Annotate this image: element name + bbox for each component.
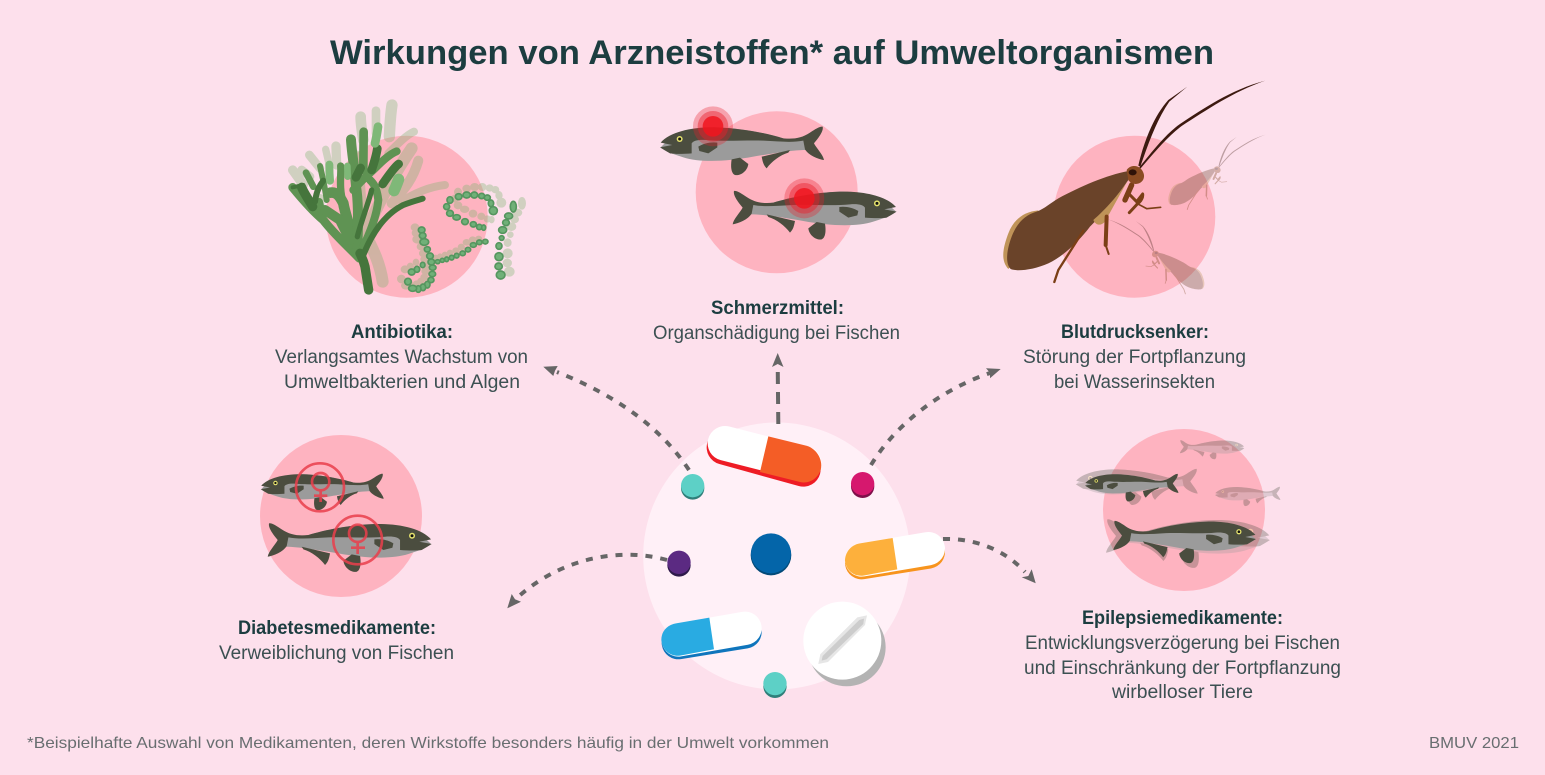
text: Diabetesmedikamente effect: Verweiblichung von Fischen	[219, 643, 454, 664]
icon: fish with organ damage	[660, 106, 897, 273]
heading: Epilepsiemedikamente: Epilepsiemedikamente:	[1082, 608, 1283, 629]
panel: Schmerzmittel	[653, 106, 900, 344]
pill: magenta	[851, 472, 874, 498]
pill: purple	[667, 551, 691, 577]
panel: medication circle	[643, 422, 928, 698]
pill: red and white capsule	[724, 436, 821, 482]
icon: water insects	[1003, 81, 1266, 298]
pill: teal bottom	[763, 672, 787, 698]
text: Blutdrucksenker effect: bei Wasserinsekten	[1054, 372, 1215, 393]
icon: algae and bacteria	[293, 105, 525, 298]
panel: Antibiotika	[275, 105, 528, 393]
text: Epilepsiemedikamente effect: und Einschränkung der Fortpflanzung	[1024, 658, 1341, 679]
pill: orange and white capsule	[845, 538, 928, 576]
heading: Blutdrucksenker: Blutdrucksenker:	[1061, 322, 1209, 343]
heading: Antibiotika: Antibiotika:	[351, 322, 453, 343]
text: Epilepsiemedikamente effect: Entwicklungsverzögerung bei Fischen	[1025, 633, 1340, 654]
text: Blutdrucksenker effect: Störung der Fortpflanzung	[1023, 347, 1246, 368]
arrow: to Diabetesmedikamente	[507, 555, 667, 608]
credit: BMUV 2021	[1429, 735, 1519, 752]
text: Schmerzmittel effect: Organschädigung bei Fischen	[653, 323, 900, 344]
arrow: to Blutdrucksenker	[871, 368, 1001, 465]
text: Antibiotika effect: Verlangsamtes Wachstum von	[275, 347, 528, 368]
pill: white scored tablet	[803, 602, 886, 686]
panel: Epilepsiemedikamente	[1024, 429, 1341, 703]
heading: Schmerzmittel: Schmerzmittel:	[711, 298, 844, 319]
title: Wirkungen von Arzneistoffen* auf Umweltorganismen	[330, 34, 1214, 72]
panel: Blutdrucksenker	[1003, 81, 1266, 393]
footnote: *Beispielhafte Auswahl von Medikamenten, deren Wirkstoffe besonders häufig in der Umwelt vorkommen	[27, 735, 829, 752]
arrow: to Schmerzmittel	[772, 353, 784, 424]
icon: fish with female symbols	[260, 435, 432, 597]
icon: fish of differing size	[1076, 429, 1280, 591]
heading: Diabetesmedikamente: Diabetesmedikamente:	[238, 618, 436, 639]
pill: large blue	[751, 533, 791, 575]
text: Epilepsiemedikamente effect: wirbelloser Tiere	[1111, 682, 1253, 703]
pill: teal top	[681, 474, 704, 500]
arrow: to Epilepsiemedikamente	[943, 539, 1036, 583]
text: Antibiotika effect: Umweltbakterien und Algen	[284, 372, 520, 393]
arrow: to Antibiotika	[543, 366, 689, 470]
panel: Diabetesmedikamente	[219, 435, 454, 664]
pill: blue and white capsule	[661, 618, 745, 656]
